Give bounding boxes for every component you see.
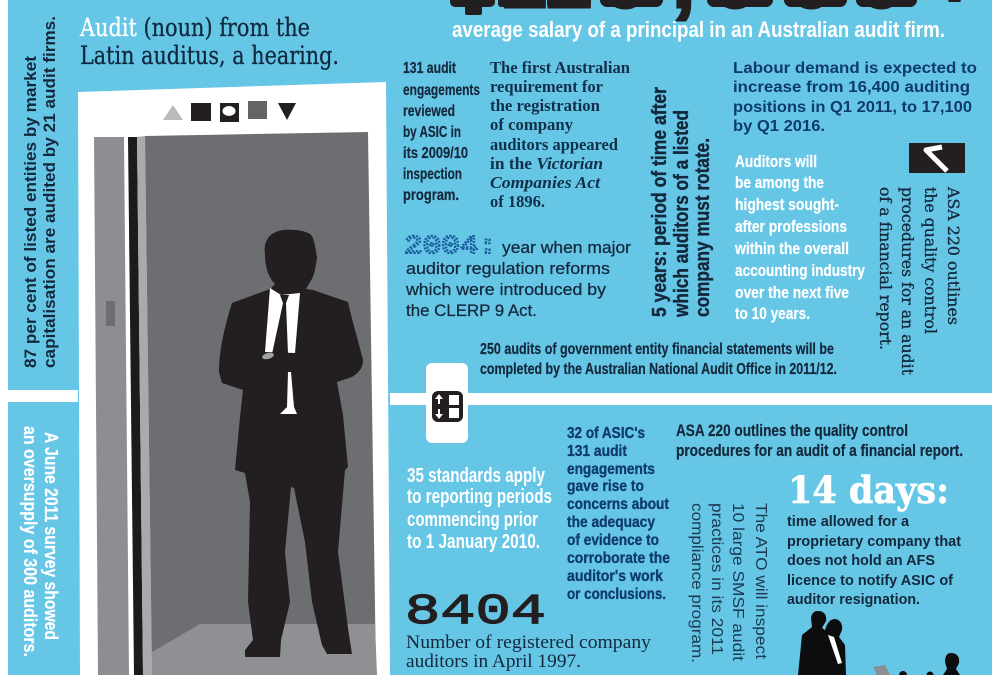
vertical text: ASA 220 (876, 186, 963, 376)
text: auditors sought-after: after professions (735, 217, 847, 236)
man tie (272, 295, 289, 354)
text: 250 audits (480, 341, 837, 378)
shirt highlight (828, 635, 842, 664)
text: first Australian requirement: in the Victorian (490, 154, 603, 173)
text: 250 audits: 250 audits of government entity financial statements will be (480, 341, 834, 358)
text: first Australian requirement: auditors appeared (490, 135, 619, 154)
text: 131 engagements reviewed: program. (403, 187, 459, 204)
text: 2004 regulation reforms (404, 231, 632, 320)
text: time allowed (787, 513, 961, 608)
text: 35 standards: to 1 January 2010. (407, 531, 540, 553)
text: 32 of ASIC's: of evidence to (567, 532, 659, 549)
text: auditors sought-after: accounting industry (735, 261, 865, 280)
text: time allowed: time allowed for a (787, 513, 910, 530)
vertical text: ASA 220: the quality control (921, 187, 940, 334)
text: first Australian requirement: Companies Act (490, 173, 601, 192)
text: 2004 regulation reforms: auditor regulation reforms (406, 260, 610, 278)
text: 131 engagements reviewed: reviewed (403, 103, 455, 120)
text: 35 standards: 35 standards apply (407, 465, 546, 487)
text: 35 standards (407, 465, 552, 553)
text: time allowed: proprietary company that (787, 533, 961, 550)
text: time allowed: auditor resignation. (787, 591, 920, 608)
man silhouette (219, 230, 363, 657)
text: auditors sought-after: highest sought- (735, 195, 839, 214)
text: 250 audits: completed by the Australian National Audit Office in 2011/12. (480, 361, 837, 378)
elevator floor (152, 624, 377, 675)
text: 2004 regulation reforms: which were introduced by (405, 281, 607, 299)
text: 131 engagements reviewed: its 2009/10 (403, 145, 468, 162)
text: 2004 regulation reforms: year when major (502, 239, 632, 257)
vertical text: 5 years rotation: which auditors of a listed (671, 110, 693, 318)
vertical text: oversupply survey: A June 2011 survey showed (41, 432, 61, 640)
vertical text: ASA 220: of a financial report. (876, 187, 895, 350)
definition heading: Latin auditus, a hearing. (80, 41, 339, 70)
text: 32 of ASIC's: auditor's work (567, 568, 663, 585)
text: 131 engagements reviewed: by ASIC in (403, 124, 461, 141)
definition heading (79, 13, 339, 70)
silhouettes: business people (798, 611, 960, 675)
text: ASA 220 horizontal (676, 421, 963, 460)
text: 2004 regulation reforms: the CLERP 9 Act. (406, 302, 537, 320)
door call button (106, 301, 115, 326)
door edge black stripe (128, 137, 143, 675)
text: 35 standards: to reporting periods (407, 486, 552, 508)
text: 32 of ASIC's: concerns about (567, 496, 669, 513)
text: labour demand: by Q1 2016. (733, 118, 825, 135)
text: registered auditors: Number of registered company (406, 633, 652, 653)
text: auditors sought-after: be among the (735, 173, 824, 192)
door edge grey stripe (137, 136, 152, 675)
text: labour demand: Labour demand is expected to (733, 60, 977, 77)
text: labour demand: increase from 16,400 auditing (733, 79, 970, 96)
seated people (899, 671, 907, 675)
man two (825, 619, 846, 675)
text: labour demand (733, 60, 977, 135)
vertical text: ATO inspection (688, 503, 769, 663)
text: auditors sought-after: to 10 years. (735, 304, 810, 323)
vertical text: ATO inspection: The ATO will inspect (752, 503, 769, 660)
text: 32 of ASIC's: engagements (567, 461, 655, 478)
text: registered auditors: auditors in April 1997. (406, 652, 581, 672)
vertical text: ASA 220: ASA 220 outlines (944, 186, 963, 325)
text: 32 of ASIC's: 131 audit (567, 443, 627, 460)
text: 131 engagements reviewed: inspection (403, 166, 462, 183)
vertical text: ATO inspection: compliance program. (688, 503, 705, 663)
text: ASA 220 horizontal: ASA 220 outlines the quality control (676, 421, 908, 440)
elevator illustration (78, 82, 390, 675)
man hand (261, 352, 275, 360)
vertical text: oversupply survey (20, 426, 61, 657)
vertical text: 5 years rotation: company must rotate. (692, 138, 714, 317)
text: 131 engagements reviewed (403, 60, 480, 204)
text: 131 engagements reviewed: 131 audit (403, 60, 457, 77)
man lower shirt (280, 372, 297, 414)
text: 32 of ASIC's: the adequacy (567, 514, 655, 531)
vertical text: ASA 220: procedures for an audit (898, 187, 917, 376)
text: first Australian requirement: of company (490, 115, 573, 134)
text: first Australian requirement: of 1896. (490, 192, 545, 211)
laptop (873, 665, 890, 675)
left white divider (8, 390, 78, 402)
text: time allowed: licence to notify ASIC of (787, 572, 954, 589)
dotted year 2004: 2004: (404, 231, 497, 261)
figure: 8404: 8404 (405, 587, 546, 636)
icon: elevator button tab (426, 363, 468, 443)
vertical text: 87 per cent: capitalisation are audited by 21 audit firms. (41, 16, 59, 368)
vertical text: ATO inspection: practices in its 2011 (708, 503, 725, 655)
vertical text: 87 per cent (22, 16, 59, 368)
text: registered auditors (406, 633, 652, 672)
text: first Australian requirement (490, 58, 631, 211)
man shirt (265, 288, 300, 353)
text: 35 standards: commencing prior (407, 509, 538, 531)
text: 131 engagements reviewed: engagements (403, 82, 480, 99)
text: auditors sought-after (734, 152, 865, 323)
text: labour demand: positions in Q1 2011, to 17,100 (733, 99, 972, 116)
text: 32 of ASIC's: or conclusions. (567, 586, 666, 603)
text: 32 of ASIC's (567, 425, 670, 603)
text: first Australian requirement: requirement for (490, 77, 603, 96)
text: 32 of ASIC's: 32 of ASIC's (567, 425, 645, 442)
elevator interior (145, 132, 376, 675)
vertical text: 5 years rotation: 5 years: period of time after (649, 87, 671, 317)
text: auditors sought-after: over the next five (735, 283, 849, 302)
text: auditors sought-after: within the overall (734, 239, 849, 258)
vertical text: 5 years rotation (649, 87, 714, 318)
heading: 14 days: 14 days: (788, 468, 949, 512)
man one (798, 611, 838, 675)
elevator door panel (94, 137, 129, 675)
elevator floor indicator icons (163, 101, 296, 122)
definition heading: Audit (noun) from the (79, 13, 310, 42)
text: 32 of ASIC's: gave rise to (567, 478, 644, 495)
text: time allowed: does not hold an AFS (787, 552, 935, 569)
icon: black box with white hook (909, 143, 965, 173)
text: 32 of ASIC's: corroborate the (567, 550, 670, 567)
elevator white frame (78, 82, 390, 675)
vertical text: 87 per cent: 87 per cent of listed entities by market (22, 55, 40, 368)
text: auditors sought-after: Auditors will (735, 152, 817, 171)
right white divider (390, 393, 992, 405)
vertical text: ATO inspection: 10 large SMSF audit (729, 503, 746, 662)
text: first Australian requirement: The first Australian (490, 58, 631, 77)
text: first Australian requirement: the registration (490, 96, 601, 115)
